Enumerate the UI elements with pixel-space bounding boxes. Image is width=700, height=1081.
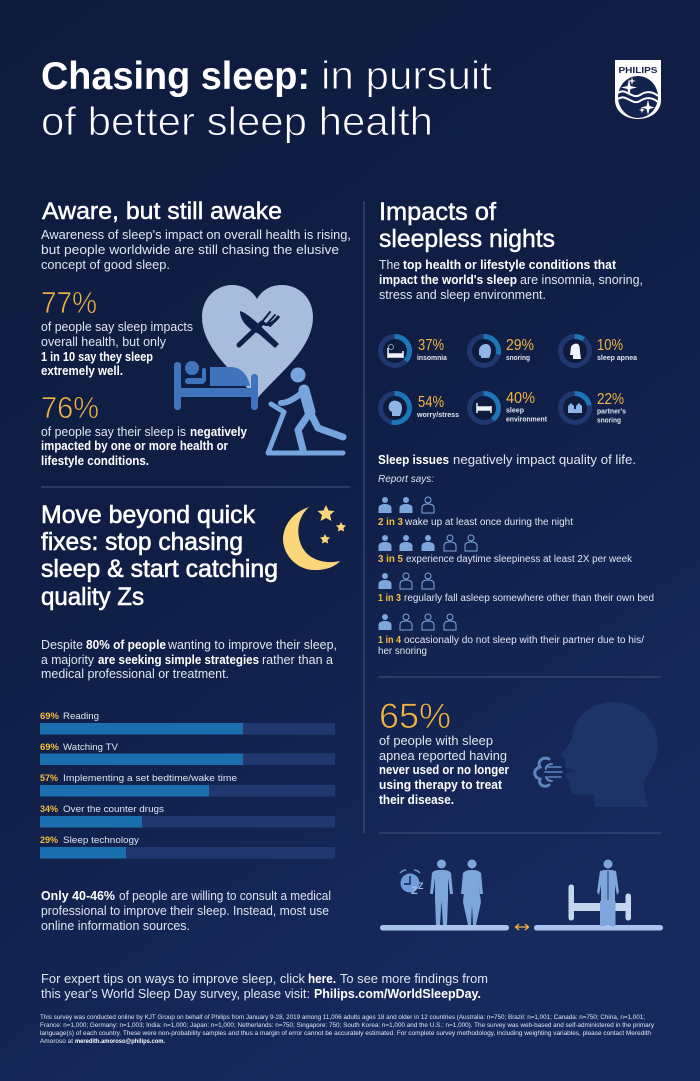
text block: survey methodology: France: n=1,000; Germany: n=1,003; India: n=1,000; Japan: n=1,000; Netherlands: n=750; Singapore: 750; South Korea: n=1,000 and the U.S.: n=1,000). The survey was web-based and self-administered in the primary — [40, 1022, 655, 1029]
row: 2 in 3: wake up at least once during the night — [404, 517, 573, 528]
icon: Philips shield logo: PHILIPS — [618, 66, 658, 75]
donut: sleep apnea 10%: 10% — [597, 337, 623, 354]
icon: alarm clock with Zs: Z — [418, 881, 424, 891]
icon: alarm clock with Zs — [400, 870, 424, 897]
text block: 65% description: never used or no longer — [379, 762, 509, 777]
heading: aware: Aware, but still awake — [42, 198, 282, 225]
icon: alarm clock with Zs: Z — [411, 885, 418, 897]
text block: only 40-46% — [41, 888, 331, 933]
donut: partner's snoring 22%: snoring — [597, 416, 621, 424]
text block: despite 80%: rather than a — [262, 652, 334, 667]
text: report says: Report says: — [378, 474, 434, 485]
title — [41, 54, 492, 144]
donut: sleep environment 40%: sleep — [506, 406, 524, 414]
bar: sleep technology: 29% — [40, 835, 59, 846]
bar: sleep technology — [40, 835, 335, 858]
bar: reading — [40, 711, 335, 734]
icon: person in bed — [174, 361, 258, 410]
text block: despite 80%: Despite — [41, 637, 83, 652]
text block: 77% description: extremely well. — [41, 364, 123, 378]
text block: 77% description — [41, 320, 193, 378]
icon: exhaled breath — [535, 758, 562, 786]
text block: top conditions — [379, 257, 643, 302]
text block: expert tips: To see more findings from — [340, 971, 488, 986]
donut: snoring 29%: snoring — [506, 353, 530, 362]
row: 1 in 4: occasionally do not sleep with their partner due to his/ — [404, 635, 644, 646]
bar: set bedtime: Implementing a set bedtime/wake time — [63, 773, 237, 784]
donut: sleep apnea 10%: sleep apnea — [597, 353, 638, 362]
platform: left — [380, 925, 509, 930]
icon: head silhouette — [561, 702, 658, 807]
arrow: two-way — [516, 924, 528, 930]
stat: 65%: 65% — [379, 697, 451, 736]
title: of better sleep health — [41, 100, 433, 144]
donut: worry/stress 54%: 54% — [418, 394, 444, 411]
text block: 65% description: of people with sleep — [379, 733, 493, 748]
text block: despite 80%: are seeking simple strategies — [98, 652, 259, 667]
bar: reading: Reading — [63, 711, 99, 722]
text block: survey methodology: Amoroso at — [40, 1038, 73, 1045]
text block: 76% description: lifestyle conditions. — [41, 454, 149, 468]
heading: impacts: sleepless nights — [379, 225, 555, 253]
icon: Philips shield logo — [615, 60, 661, 119]
donut: partner's snoring 22%: 22% — [597, 391, 624, 408]
text block: 65% description: apnea reported having — [379, 748, 507, 763]
bar: over the counter drugs — [40, 804, 335, 828]
text block: despite 80%: wanting to improve their sleep, — [167, 637, 337, 652]
heading: move beyond: Move beyond quick — [41, 501, 255, 529]
panel: sleep apnea 65% — [379, 697, 658, 807]
row: 2 in 3: 2 in 3 — [378, 517, 403, 528]
heading: move beyond: fixes: stop chasing — [41, 528, 243, 556]
icon: woman — [461, 860, 483, 925]
text block: 76% description: negatively — [190, 425, 247, 439]
icon: doctor — [597, 860, 619, 926]
text block: only 40-46%: of people are willing to consult a medical — [119, 888, 331, 903]
text block: expert tips — [41, 971, 488, 1001]
text block: top conditions: top health or lifestyle conditions that — [403, 257, 617, 272]
heading: sleep issues: negatively impact quality of life. — [453, 453, 636, 467]
text block: expert tips: here. — [308, 971, 336, 986]
text block: top conditions: The — [379, 257, 400, 272]
bar: over the counter drugs: 34% — [40, 804, 59, 815]
row: 3 in 5 — [378, 535, 633, 565]
row: 1 in 4: 1 in 4 — [378, 635, 401, 646]
panel: consult vs online illustration — [380, 860, 663, 930]
bar: sleep technology: Sleep technology — [63, 835, 139, 846]
donut: insomnia 37%: insomnia — [417, 353, 448, 362]
donut: sleep apnea 10% — [560, 336, 638, 366]
bar: reading: 69% — [40, 711, 60, 722]
donut: sleep environment 40% — [470, 390, 547, 424]
text block: aware intro: but people worldwide are still chasing the elusive — [41, 242, 339, 257]
text block: only 40-46%: online information sources. — [41, 918, 190, 933]
text block: despite 80% — [41, 637, 337, 681]
text block: top conditions: are insomnia, snoring, — [520, 272, 643, 287]
heading: sleep issues — [378, 453, 636, 467]
donut: snoring 29%: 29% — [506, 337, 534, 354]
bar chart: simple strategies — [40, 711, 335, 858]
text block: survey methodology — [40, 1014, 655, 1045]
bar: watching tv: Watching TV — [63, 742, 119, 753]
heading: sleep issues: Sleep issues — [378, 453, 449, 467]
text block: 76% description: of people say their sleep is — [41, 425, 186, 439]
bar: watching tv — [40, 742, 335, 765]
row: 1 in 3 — [378, 573, 654, 604]
row: 1 in 4 — [378, 614, 644, 657]
donut: worry/stress 54% — [380, 394, 459, 422]
bar: set bedtime — [40, 773, 335, 796]
text block: 65% description — [379, 733, 509, 807]
icon: man — [430, 860, 453, 925]
icon: moon and stars — [283, 505, 346, 570]
text block: expert tips: Philips.com/WorldSleepDay. — [314, 986, 481, 1001]
text block: 76% description: impacted by one or more health or — [41, 439, 228, 453]
panel: sleep issues — [378, 453, 654, 657]
text block: survey methodology: This survey was conducted online by KJT Group on behalf of Philips from January 9-28, 2019 among 11,006 adults ages 18 and older in 12 countries (Australia: n=750; Brazil: n=1,001; Canada: n=750; China, n=1,001; — [40, 1014, 645, 1021]
text block: despite 80%: a majority — [41, 652, 94, 667]
text block: aware intro: concept of good sleep. — [41, 257, 170, 272]
text block: top conditions: impact the world's sleep — [379, 272, 517, 287]
heading: move beyond — [41, 501, 278, 611]
text block: 77% description: 1 in 10 say they sleep — [41, 350, 153, 364]
stat: 77%: 77% — [41, 285, 97, 320]
text block: expert tips: For expert tips on ways to improve sleep, click — [41, 971, 305, 986]
title: in pursuit — [321, 54, 492, 98]
panel: impacts of sleepless nights — [379, 198, 643, 424]
row: 2 in 3 — [378, 497, 573, 528]
text block: 77% description: overall health, but only — [41, 335, 167, 349]
title: Chasing sleep: — [41, 55, 310, 98]
heading: impacts — [379, 198, 555, 253]
text block: aware intro — [41, 227, 351, 272]
donut: sleep environment 40%: environment — [506, 414, 547, 424]
bar: set bedtime: 57% — [40, 773, 59, 784]
donut: insomnia 37%: 37% — [418, 337, 444, 354]
row: 3 in 5: 3 in 5 — [378, 554, 403, 565]
donut: insomnia 37% — [380, 336, 448, 366]
row: 1 in 3: regularly fall asleep somewhere other than their own bed — [404, 593, 654, 604]
icon: hospital bed — [568, 884, 631, 920]
row: 3 in 5: experience daytime sleepiness at least 2X per week — [406, 554, 633, 565]
text block: despite 80%: 80% of people — [86, 637, 166, 652]
heading: move beyond: quality Zs — [41, 583, 144, 611]
text block: only 40-46%: professional to improve their sleep. Instead, most use — [41, 903, 329, 918]
row: 1 in 4: her snoring — [378, 646, 427, 657]
text block: 76% description — [41, 425, 247, 468]
text block: expert tips: this year's World Sleep Day survey, please visit: — [41, 986, 310, 1001]
bar: over the counter drugs: Over the counter drugs — [63, 804, 164, 815]
row: 1 in 3: 1 in 3 — [378, 593, 401, 604]
donut: snoring 29% — [470, 336, 534, 366]
heading: move beyond: sleep & start catching — [41, 555, 278, 583]
text block: 65% description: using therapy to treat — [379, 777, 503, 792]
donut: worry/stress 54%: worry/stress — [416, 410, 459, 419]
stat: 76%: 76% — [41, 390, 99, 425]
panel: aware but still awake — [41, 198, 351, 468]
bar: watching tv: 69% — [40, 742, 60, 753]
text block: aware intro: Awareness of sleep's impact on overall health is rising, — [41, 227, 351, 242]
heading: impacts: Impacts of — [379, 198, 496, 226]
platform: right — [534, 925, 663, 930]
panel: move beyond quick fixes — [40, 501, 346, 933]
text block: top conditions: stress and sleep environment. — [379, 287, 546, 302]
donut: partner's snoring 22%: partner's — [597, 406, 626, 416]
icon: person on treadmill — [268, 368, 343, 453]
donut: partner's snoring 22% — [560, 391, 626, 424]
text block: survey methodology: meredith.amoroso@philips.com. — [75, 1038, 165, 1045]
icon: heart with knife and fork — [202, 285, 313, 399]
text block: 65% description: their disease. — [379, 792, 454, 807]
text block: despite 80%: medical professional or treatment. — [41, 666, 229, 681]
text block: survey methodology: language(s) of each country. These were non-probability samples and thus a margin of error cannot be accurately estimated. For complete survey methodology, including weighting variables, please contact Meredith — [40, 1030, 651, 1037]
text block: 77% description: of people say sleep impacts — [41, 320, 193, 334]
text block: only 40-46%: Only 40-46% — [41, 888, 115, 903]
donut: sleep environment 40%: 40% — [506, 390, 535, 407]
